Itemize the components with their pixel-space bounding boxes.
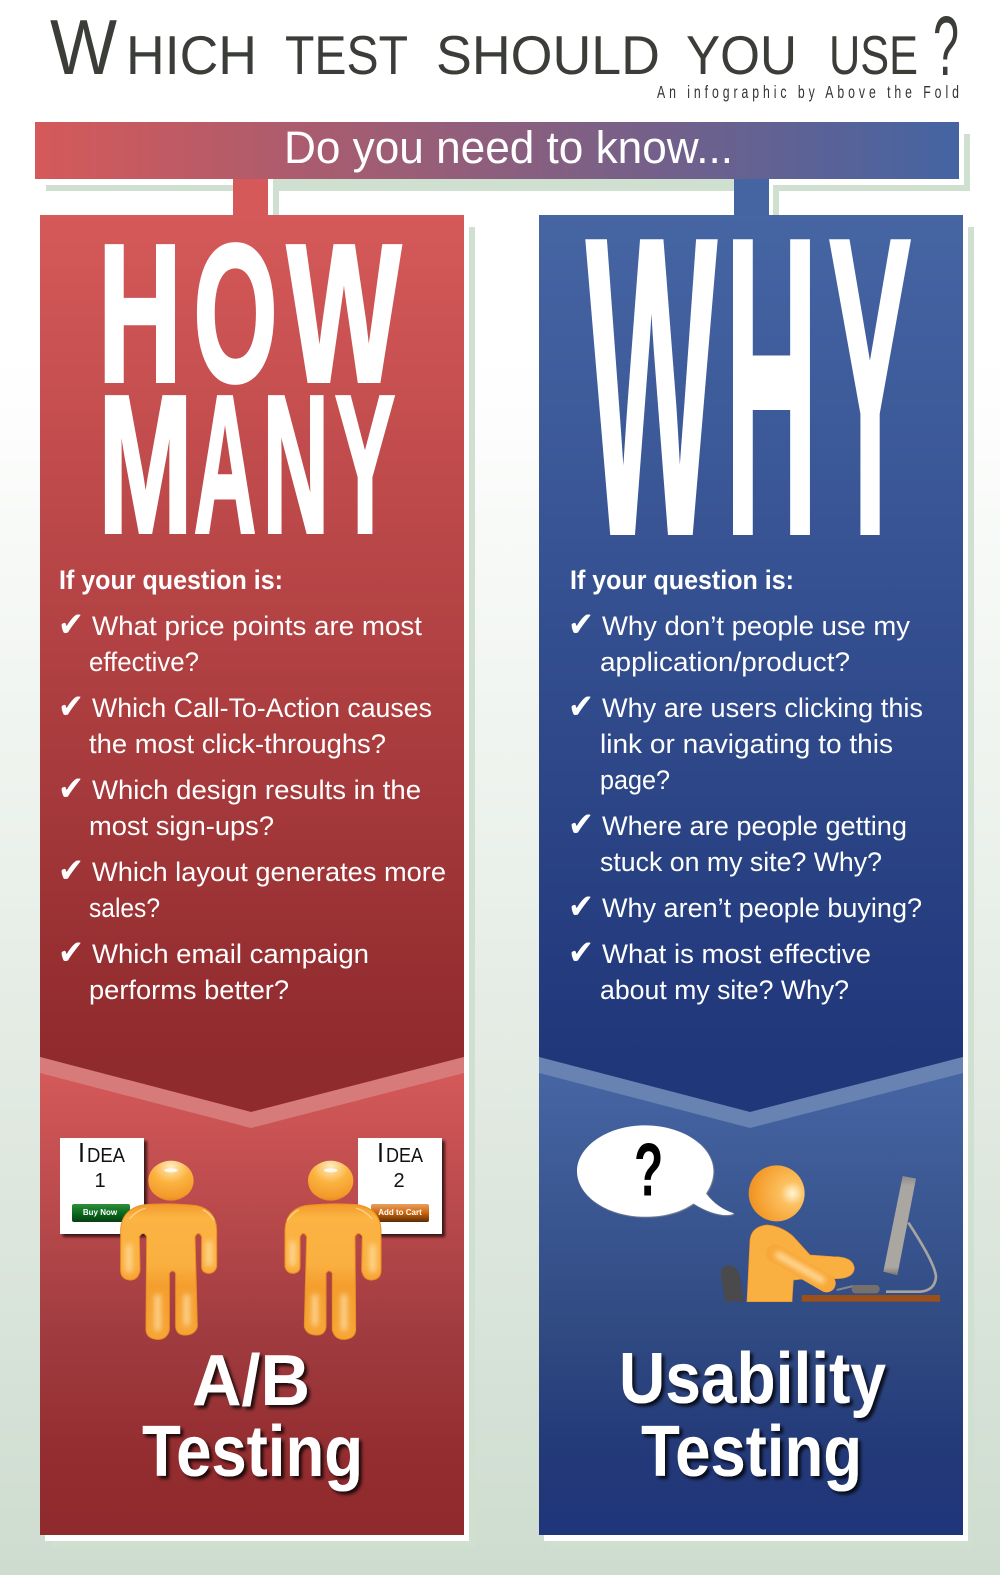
question list: how many: Which Call-To-Action causes [92,693,432,723]
icon: speech bubble with question mark [577,1125,734,1217]
heading: how many: O [194,204,277,423]
title: SHOULD [436,24,660,86]
heading: how many: W [287,204,401,423]
question banner [35,122,959,179]
question list: how many: Which layout generates more [92,857,446,887]
heading: how many [98,204,401,574]
connector: right [734,178,769,216]
title: HICH [126,24,257,86]
card: idea 2: 2 [393,1170,405,1192]
question list: why: page? [600,765,670,795]
question list: why: ✔ [568,687,594,727]
question list: how many: ✔ [58,851,84,891]
question list: why: If your question is: [570,565,794,595]
title [50,0,959,93]
question list: how many: What price points are most [92,611,422,641]
card: idea 2: I [377,1137,384,1168]
head [749,1165,805,1221]
title: USE [829,24,918,86]
torso [747,1225,854,1302]
heading: how many: M [98,355,192,574]
heading: how many: A [194,355,256,574]
bar shadow and connector shadows [46,134,970,215]
question list: why: ✔ [568,933,594,973]
question list: why: about my site? Why? [600,975,849,1005]
monitor stand [886,1223,936,1292]
title: YOU [686,24,797,86]
question list: how many: ✔ [58,687,84,727]
card: idea 1 [60,1137,144,1234]
heading: why: W [586,149,718,623]
icon: person left [121,1161,217,1339]
question list: how many: the most click-throughs? [89,729,386,759]
heading: how many: Y [335,355,395,574]
card: idea 2 [358,1137,442,1234]
title: TEST [285,24,408,86]
question banner: Do you need to know... [284,122,733,173]
label: a/b testing [142,1341,363,1492]
question list: how many: ✔ [58,933,84,973]
question list: how many [58,565,446,1005]
question list: why: Where are people getting [602,811,907,841]
card: idea 2: DEA [386,1145,424,1167]
icon: speech bubble with question mark: ? [634,1127,663,1211]
question list: why: ✔ [568,887,594,927]
subtitle: byline: An infographic by Above the Fold [657,83,959,103]
icon: person at computer [721,1165,940,1302]
question list: how many: ✔ [58,605,84,645]
question list: how many: Which email campaign [92,939,369,969]
question list: how many: ✔ [58,769,84,809]
icon: person right [285,1161,381,1339]
question list: how many: performs better? [89,975,289,1005]
keyboard [837,1286,853,1290]
question list: why: Why don’t people use my [602,611,910,641]
card: idea 1: 1 [94,1170,106,1192]
question list: why: Why are users clicking this [602,693,923,723]
question list: why: Why aren’t people buying? [602,893,922,923]
question list: why [568,565,923,1005]
question list: why: ✔ [568,805,594,845]
label: usability testing: Testing [641,1412,862,1492]
question list: how many: Which design results in the [92,775,421,805]
panel: how many [40,204,475,1547]
panel: why [539,149,974,1547]
heading: how many: H [98,204,182,423]
question list: why: ✔ [568,605,594,645]
monitor [883,1176,916,1275]
connector: left [233,178,268,216]
desk [802,1295,940,1302]
card: idea 1: Buy Now [83,1208,118,1217]
title: W [50,3,117,91]
card: idea 1: I [78,1137,85,1168]
question list: how many: most sign-ups? [89,811,274,841]
title: ? [933,0,959,93]
label: usability testing [619,1339,886,1492]
chair [721,1265,744,1302]
arm [775,1253,827,1283]
question list: how many: If your question is: [59,565,283,595]
question list: how many: effective? [89,647,199,677]
question list: how many: sales? [89,893,160,923]
question list: why: What is most effective [602,939,871,969]
heading: how many: N [263,355,329,574]
card: idea 2: Add to Cart [378,1208,422,1217]
question list: why: stuck on my site? Why? [600,847,882,877]
label: a/b testing: Testing [142,1412,363,1492]
question list: why: application/product? [600,647,850,677]
card: idea 1: DEA [87,1145,126,1167]
question list: why: link or navigating to this [600,729,893,759]
label: usability testing: Usability [619,1339,886,1419]
label: a/b testing: A/B [192,1341,310,1421]
